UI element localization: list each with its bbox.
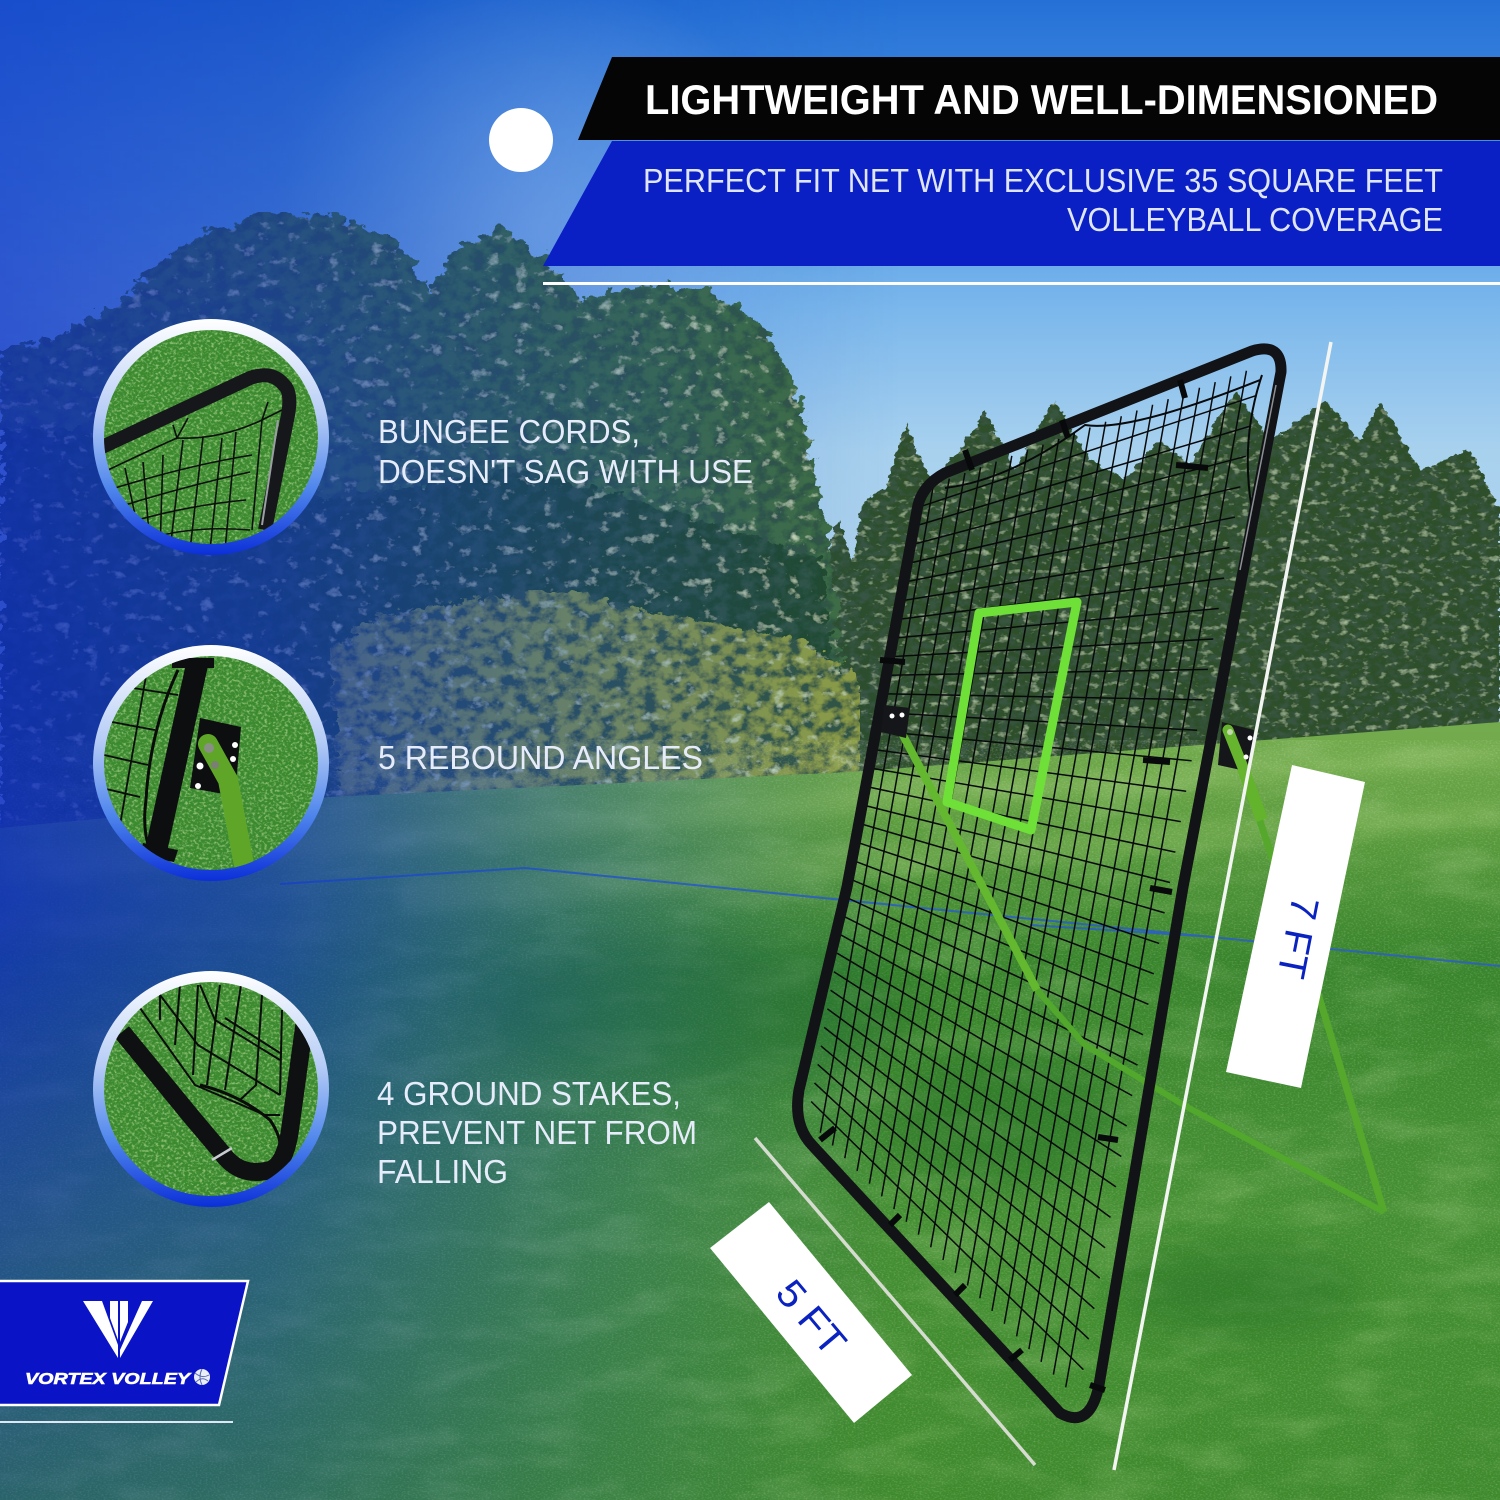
feature circle: bungee cords <box>93 319 329 555</box>
feature label: ground stakes: PREVENT NET FROM <box>377 1114 697 1151</box>
feature label: ground stakes: 4 GROUND STAKES, <box>377 1075 681 1112</box>
header: blue subtitle band <box>543 141 1500 266</box>
frame clips <box>820 380 1208 1390</box>
green target frame <box>947 602 1077 830</box>
feature circle: rebound angles <box>93 645 329 881</box>
subtitle text: PERFECT FIT NET WITH EXCLUSIVE 35 SQUARE FEET <box>643 162 1443 199</box>
rebound net mesh <box>811 371 1262 1387</box>
pipe <box>100 375 289 530</box>
mown lawn stripes <box>0 745 1500 915</box>
feature label: bungee cords: BUNGEE CORDS, <box>378 413 640 450</box>
pipe <box>122 1020 305 1172</box>
right adjustment bracket <box>1218 722 1254 775</box>
logo wordmark: VORTEX VOLLEY <box>25 1371 192 1388</box>
logo mark <box>83 1301 153 1358</box>
conifer tree line <box>740 391 1500 810</box>
blue gradient overlay on the left side <box>0 0 836 1500</box>
feature label: bungee cords: DOESN'T SAG WITH USE <box>378 453 753 490</box>
dimension label: 7 FT <box>1226 765 1365 1088</box>
feature label: rebound angles: 5 REBOUND ANGLES <box>378 739 703 776</box>
rebounder frame <box>798 349 1281 1418</box>
dimension label: 5 FT <box>710 1202 912 1423</box>
dimension line: width <box>755 1138 1035 1465</box>
pole <box>154 660 198 860</box>
worn grass shadows <box>470 940 1360 1335</box>
header: black title band <box>578 57 1500 140</box>
logo volleyball <box>194 1369 210 1385</box>
volleyball dot <box>489 108 553 172</box>
logo panel <box>0 1281 248 1405</box>
yellow-green hedge <box>330 590 860 810</box>
dimension label: 7 FT: 7 FT <box>1268 893 1326 982</box>
rear support strut: left, running down over the net <box>896 722 1384 1212</box>
dimension line: height <box>1114 342 1331 1470</box>
green arm <box>208 744 245 870</box>
court boundary lines <box>280 868 1500 966</box>
feature circle: ground stakes <box>93 971 329 1207</box>
subtitle text: VOLLEYBALL COVERAGE <box>1067 201 1443 238</box>
title: LIGHTWEIGHT AND WELL-DIMENSIONED <box>645 76 1438 123</box>
dimension label: 5 FT: 5 FT <box>767 1272 854 1364</box>
bracket <box>190 718 241 796</box>
left adjustment bracket <box>881 705 910 738</box>
feature label: ground stakes: FALLING <box>377 1153 508 1190</box>
rear support strut: right <box>1234 744 1384 1212</box>
deciduous tree band <box>0 212 850 840</box>
